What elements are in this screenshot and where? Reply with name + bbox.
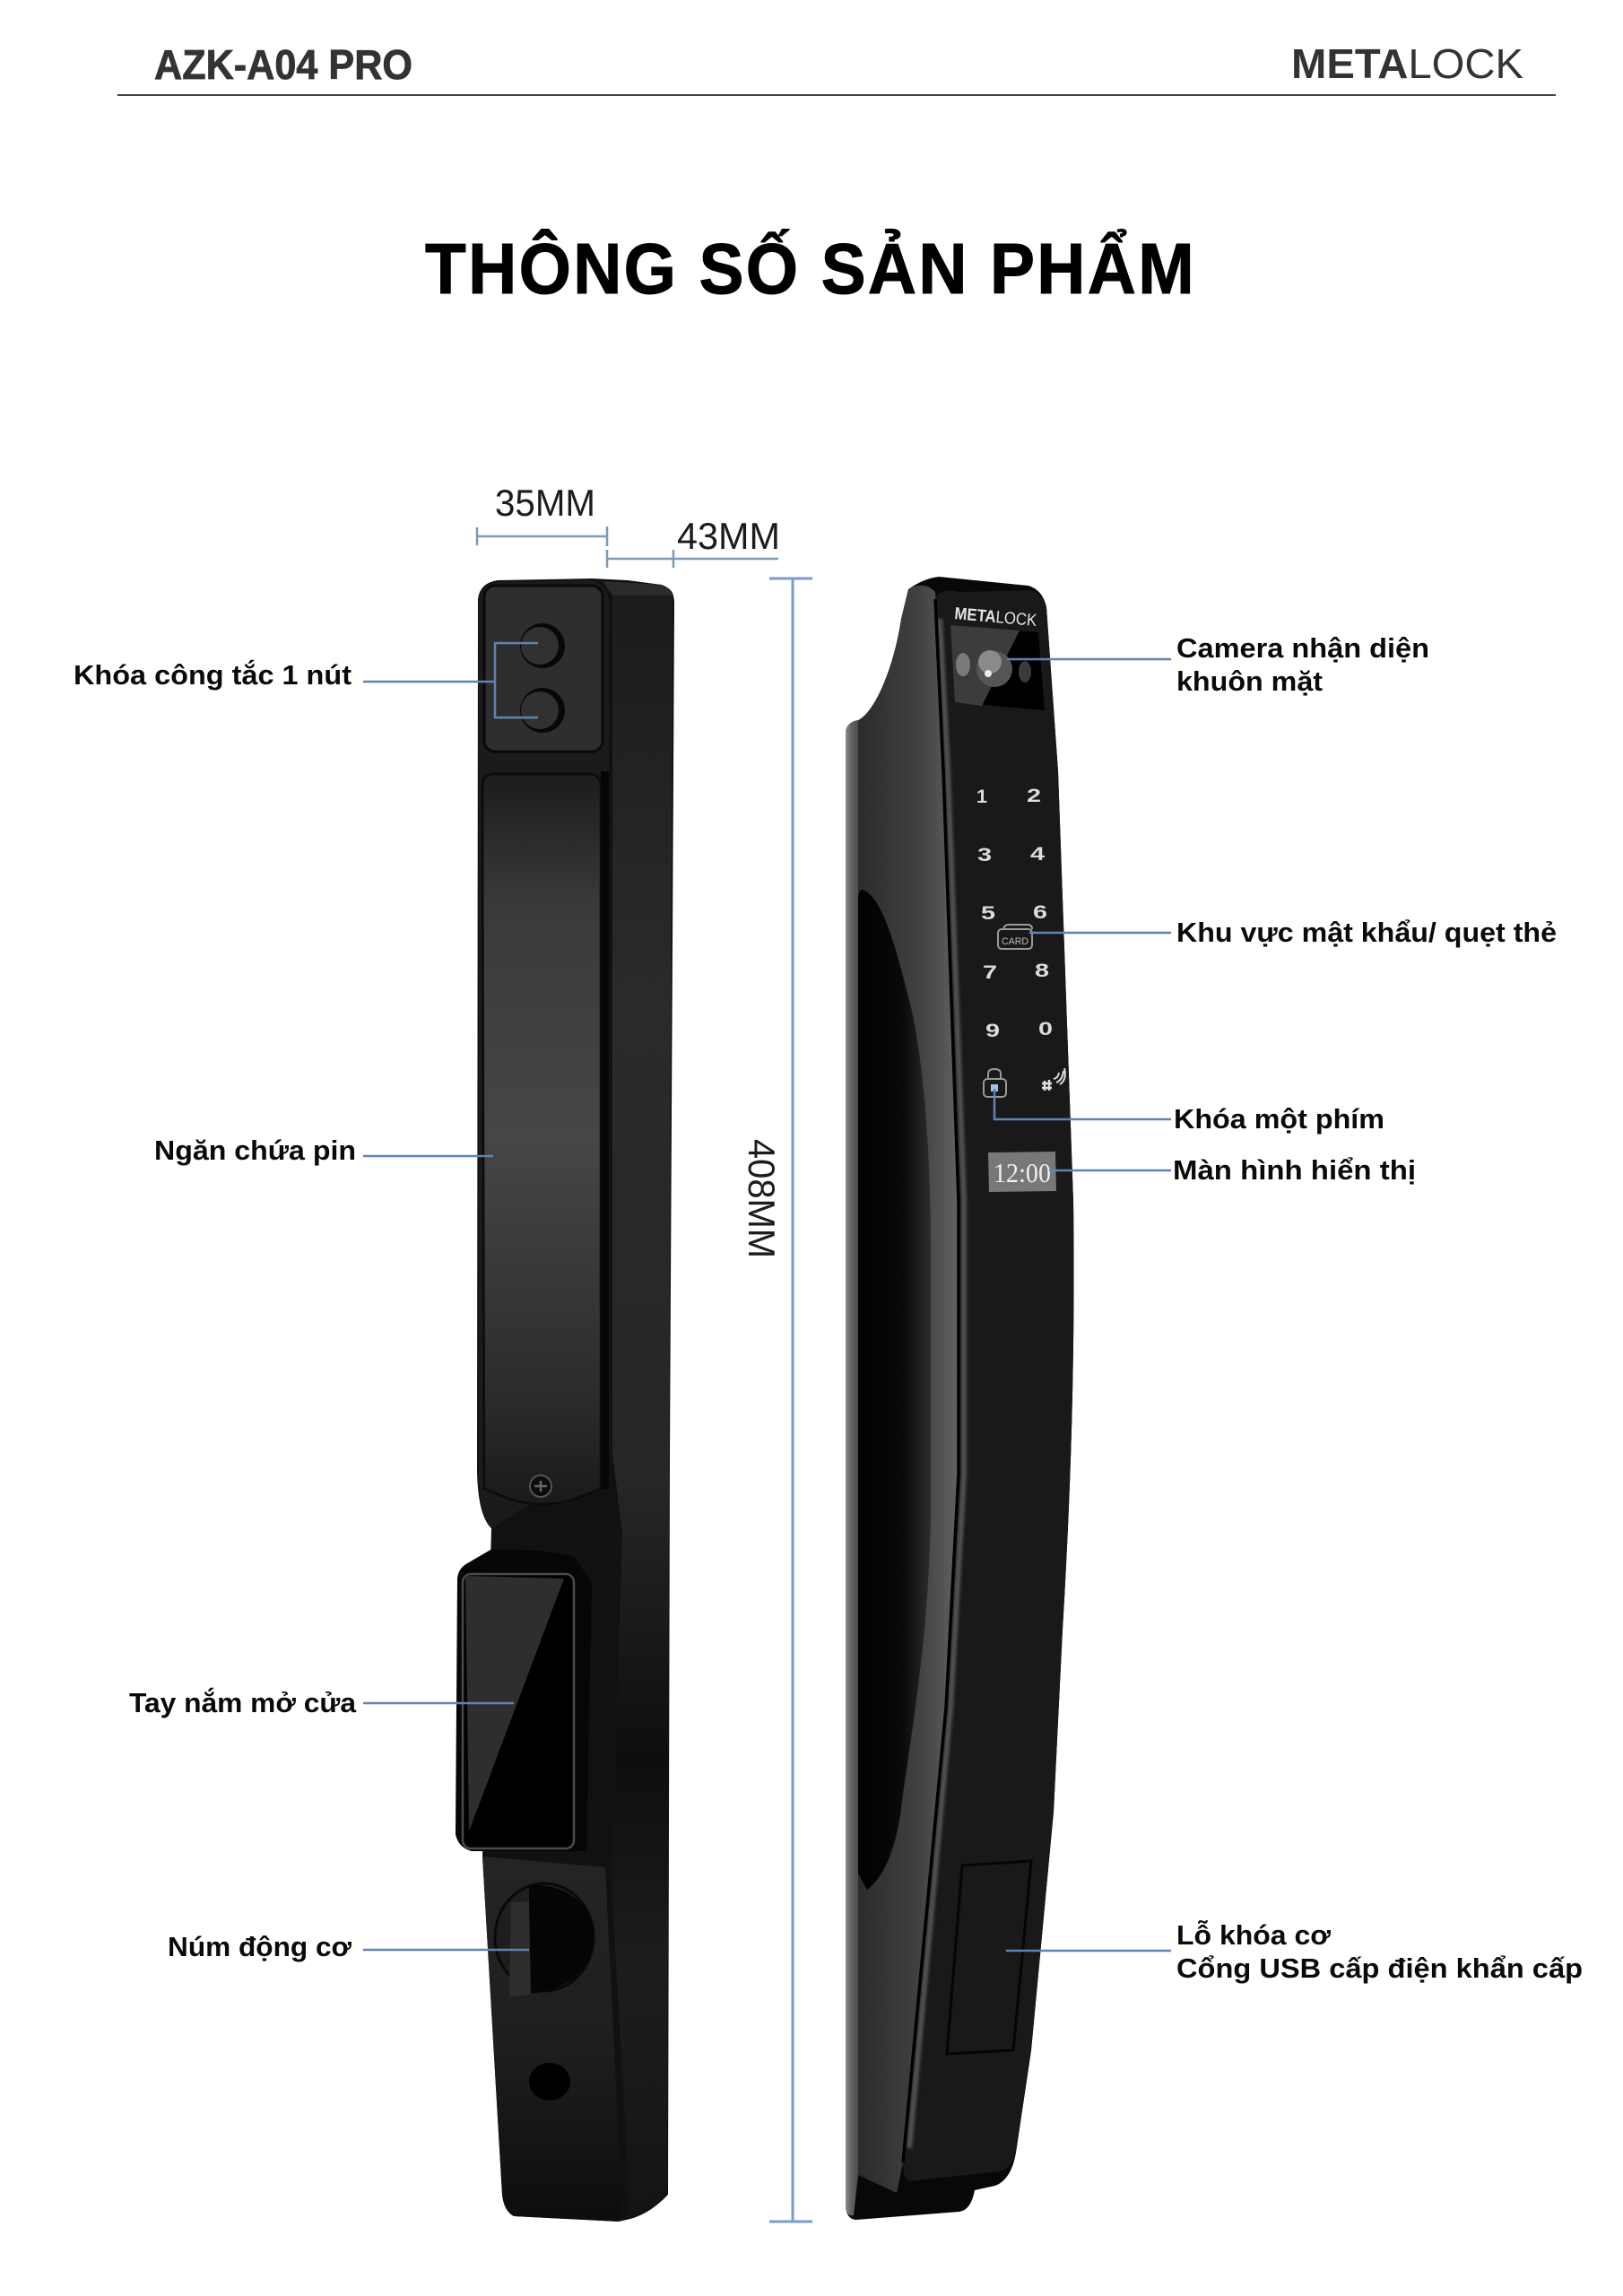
key hole xyxy=(529,2063,570,2100)
right lock body: front view xyxy=(846,577,1074,2220)
keypad digits: 6 xyxy=(1033,902,1047,923)
emergency port cover xyxy=(947,1861,1031,2054)
grip recess xyxy=(858,890,931,1890)
lock brand mark: METALOCK xyxy=(954,604,1037,631)
keypad digits xyxy=(976,786,1053,1041)
callout: one-touch lock key: Khóa một phím xyxy=(1174,1103,1384,1135)
display screen: 12:00 xyxy=(994,1157,1051,1188)
dimension: 35MM xyxy=(477,482,607,546)
title: THÔNG SỐ SẢN PHẨM xyxy=(425,229,1196,309)
callout: one-touch switch: Khóa công tắc 1 nút xyxy=(74,658,352,691)
button upper xyxy=(520,623,565,668)
switch plate with buttons xyxy=(484,586,603,752)
callout: face recognition camera xyxy=(1007,632,1429,697)
callout: one-touch lock key xyxy=(994,1089,1384,1135)
dimension: 408MM xyxy=(741,578,812,2222)
keypad digits: 8 xyxy=(1035,961,1049,981)
keypad digits: 0 xyxy=(1038,1019,1053,1039)
keypad digits: 7 xyxy=(983,962,997,983)
side rim xyxy=(846,720,858,2215)
front frame xyxy=(479,580,610,1528)
lever handle xyxy=(456,1550,592,1851)
callout: face recognition camera: khuôn mặt xyxy=(1176,665,1323,697)
dimension: 408MM: 408MM xyxy=(741,1139,783,1258)
lens xyxy=(976,651,1012,687)
callout: battery compartment: Ngăn chứa pin xyxy=(154,1135,356,1166)
screw xyxy=(530,1475,551,1497)
callout: mechanical keyhole and USB: Cổng USB cấp điện khẩn cấp xyxy=(1176,1952,1583,1984)
icon: card reader: CARD xyxy=(1002,936,1028,947)
dimension: 43MM: 43MM xyxy=(677,515,780,557)
button lower xyxy=(520,688,565,733)
keypad digits: 1 xyxy=(976,787,987,807)
keypad digits: 4 xyxy=(1030,844,1045,865)
icon: card reader xyxy=(998,925,1032,949)
battery compartment xyxy=(482,774,601,1504)
icon: one-touch lock xyxy=(984,1069,1006,1097)
callout: door handle: Tay nắm mở cửa xyxy=(129,1686,357,1718)
IR lamp left xyxy=(956,653,970,676)
keypad digits: 2 xyxy=(1027,786,1041,806)
top bevel xyxy=(603,581,673,596)
header: brand logo: METALOCK xyxy=(1291,40,1523,87)
motor knob xyxy=(495,1883,594,1996)
callout: one-touch switch xyxy=(74,643,538,718)
IR lamp right xyxy=(1019,661,1031,683)
keypad digits: 9 xyxy=(985,1021,1000,1041)
left lock body: rear view xyxy=(456,578,674,2222)
keypad digits: 5 xyxy=(981,903,995,924)
callout: mechanical keyhole and USB: Lỗ khóa cơ xyxy=(1176,1919,1332,1951)
callout: passcode and card area: Khu vực mật khẩu/ quẹt thẻ xyxy=(1176,917,1557,948)
keypad digits: 3 xyxy=(977,845,992,865)
lower plate xyxy=(482,1857,621,2222)
panel edge groove xyxy=(903,599,959,2162)
side face xyxy=(612,596,673,2217)
keypad panel xyxy=(903,590,1074,2181)
camera window xyxy=(950,625,1045,710)
icon: hash and wireless xyxy=(1042,1068,1065,1091)
dimension: 35MM: 35MM xyxy=(495,482,595,524)
header rule xyxy=(117,94,1556,96)
callout: mechanical keyhole and USB xyxy=(1006,1919,1583,1984)
dimension: 43MM xyxy=(607,515,780,568)
rear body silhouette xyxy=(477,578,674,2222)
callout: face recognition camera: Camera nhận diện xyxy=(1176,632,1429,664)
front body silhouette xyxy=(846,577,1074,2220)
handle band xyxy=(858,586,958,2193)
callout: motor knob: Núm động cơ xyxy=(168,1931,352,1962)
glass reflection xyxy=(465,1576,564,1831)
callout: display: Màn hình hiển thị xyxy=(1173,1154,1416,1186)
header: model name: AZK-A04 PRO xyxy=(154,41,412,88)
panel edge highlight xyxy=(909,619,964,2148)
panel divider xyxy=(601,771,609,1489)
